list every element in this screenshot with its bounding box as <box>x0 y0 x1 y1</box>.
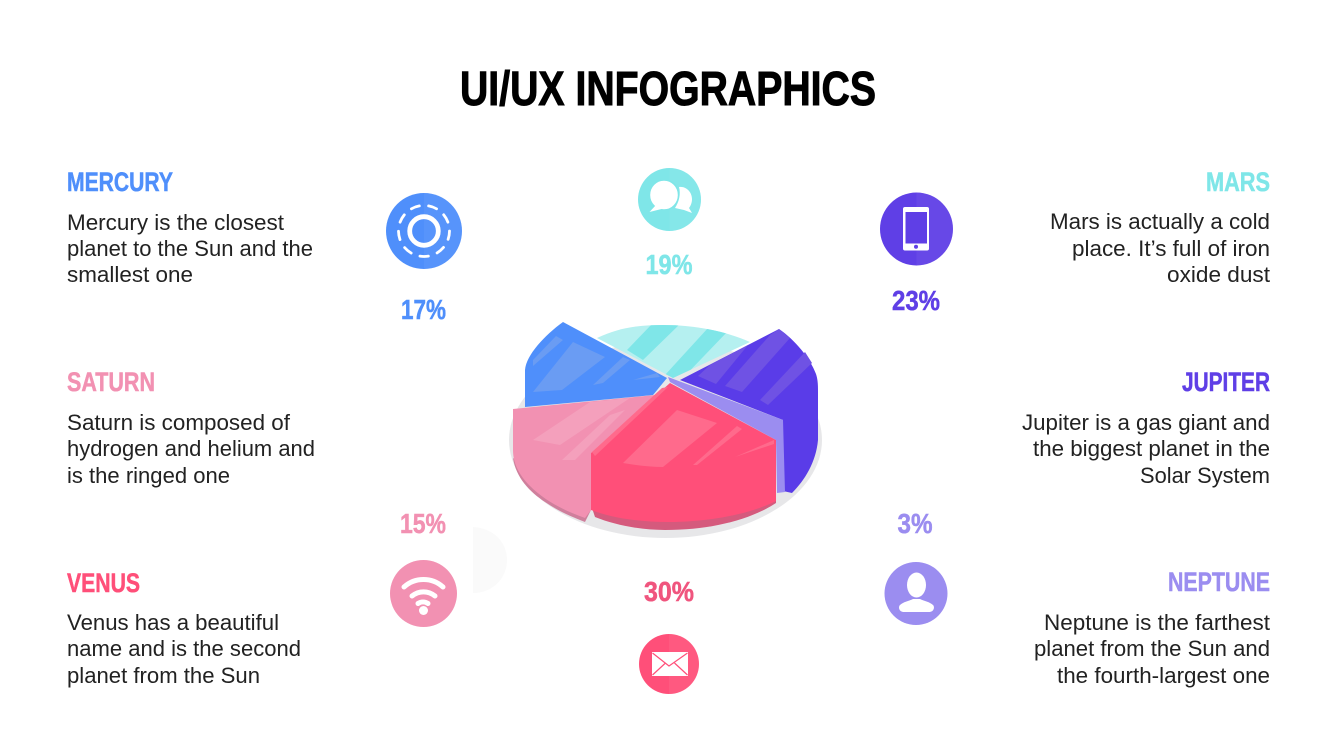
text block: Jupiter: Jupiter is a gas giant and <box>1022 410 1270 435</box>
text block: Saturn: Saturn is composed of <box>67 410 291 435</box>
percentage: 17%: 17% <box>401 294 446 325</box>
text block: Saturn: is the ringed one <box>67 463 230 488</box>
text block: Venus <box>67 610 301 688</box>
chart: isometric pie <box>509 322 822 538</box>
text block: Jupiter: Solar System <box>1140 463 1270 488</box>
pie base shadow <box>509 342 822 538</box>
text block: Mars: oxide dust <box>1167 262 1270 287</box>
panel: Mercury <box>67 167 313 287</box>
slice: Saturn 15% pink <box>513 395 655 522</box>
text block: Mars: Mars is actually a cold <box>1050 209 1270 234</box>
icon: phone <box>880 192 953 266</box>
slice: Venus 30% red <box>591 383 776 530</box>
text block: Mercury: planet to the Sun and the <box>67 236 313 261</box>
slice: Mercury 17% blue <box>525 322 667 407</box>
heading: Mercury: MERCURY <box>67 167 173 197</box>
text block: Neptune <box>1034 610 1270 688</box>
text block: Saturn: hydrogen and helium and <box>67 436 315 461</box>
slice: Mars 19% teal <box>597 324 750 381</box>
text block: Saturn <box>67 410 315 488</box>
slice: Neptune 3% light purple <box>668 377 785 493</box>
text block: Neptune: Neptune is the farthest <box>1044 610 1270 635</box>
heading: Saturn: SATURN <box>67 367 155 397</box>
percentage: 19%: 19% <box>646 249 693 280</box>
heading: Jupiter: JUPITER <box>1182 367 1270 397</box>
text block: Venus: name and is the second <box>67 636 301 661</box>
icon: envelope <box>639 634 699 694</box>
text block: Jupiter <box>1022 410 1270 488</box>
panel: Venus <box>67 568 301 688</box>
text block: Neptune: the fourth-largest one <box>1057 663 1270 688</box>
heading: Neptune: NEPTUNE <box>1168 567 1270 597</box>
text block: Neptune: planet from the Sun and <box>1034 636 1270 661</box>
icon: chat bubbles <box>638 168 701 231</box>
icon: wifi <box>390 560 457 627</box>
percentage: 3%: 3% <box>898 508 933 539</box>
heading: Mars: MARS <box>1206 167 1270 197</box>
panel: Jupiter <box>1022 367 1270 488</box>
text block: Mars <box>1050 209 1270 287</box>
infographic canvas <box>66 70 1270 694</box>
decorative faint half disc <box>473 527 507 593</box>
text block: Mars: place. It’s full of iron <box>1072 236 1270 261</box>
percentage: 23%: 23% <box>892 285 940 316</box>
text block: Mercury <box>67 210 313 287</box>
icon: Mercury target circle <box>386 193 462 269</box>
icon: person <box>884 562 948 625</box>
title: UI/UX INFOGRAPHICS <box>460 63 876 116</box>
text block: Venus: planet from the Sun <box>67 663 260 688</box>
text block: Jupiter: the biggest planet in the <box>1033 436 1270 461</box>
panel: Mars <box>1050 167 1270 287</box>
slice: Jupiter 23% purple <box>680 329 818 493</box>
percentage: 30%: 30% <box>644 576 694 607</box>
panel: Saturn <box>67 367 315 488</box>
percentage: 15%: 15% <box>400 508 446 539</box>
text block: Mercury: smallest one <box>67 262 193 287</box>
text block: Mercury: Mercury is the closest <box>67 210 284 235</box>
text block: Venus: Venus has a beautiful <box>67 610 279 635</box>
panel: Neptune <box>1034 567 1270 688</box>
heading: Venus: VENUS <box>67 568 140 598</box>
